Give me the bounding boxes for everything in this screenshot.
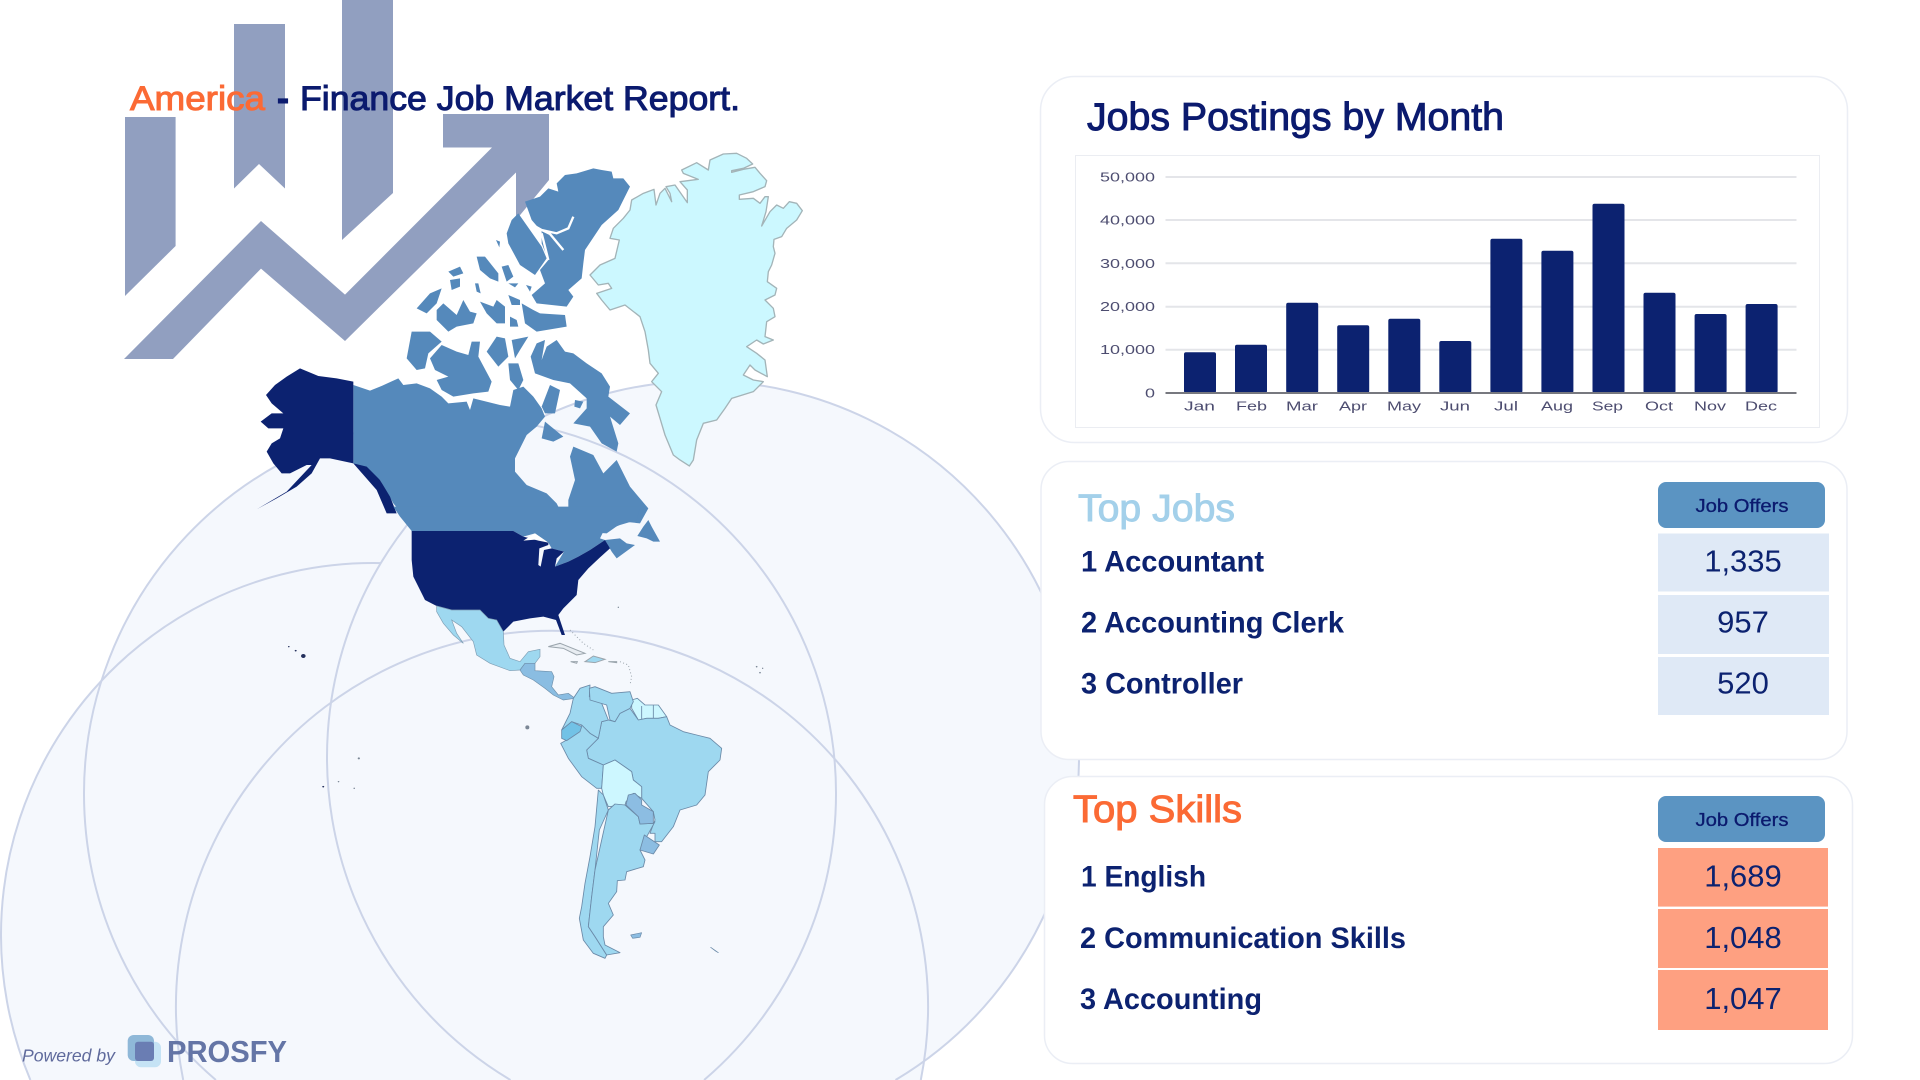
powered by Prosfy branding: Powered by [22,1046,116,1066]
bar chart [1076,156,1820,428]
chart heading: Jobs Postings by Month [1087,96,1504,139]
map: South America [561,685,722,958]
title: America [130,80,265,118]
bar chart: 20,000 [1100,299,1155,314]
row: Accounting Clerk: 957 [1717,604,1769,640]
bar chart: Sep [1592,399,1623,414]
title [130,80,740,118]
row: English: 1,689 [1704,858,1782,894]
map: small islands [525,607,763,729]
row: Controller: 3 Controller [1081,668,1243,700]
row: Accounting Clerk: 2 Accounting Clerk [1081,606,1344,640]
heading: top jobs: Top Jobs [1078,488,1235,530]
bar chart: May [1387,399,1422,414]
column header: job offers [1658,482,1825,528]
bar chart: Nov [1694,399,1727,414]
map: Pacific islands [288,646,360,789]
column header: job offers [1658,796,1825,842]
row: Controller [1081,657,1829,715]
row: Accounting [1080,970,1828,1030]
bar chart: Mar [1286,399,1319,414]
row: English [1081,848,1828,907]
map: Greenland [590,153,802,466]
bar chart: 40,000 [1100,212,1155,228]
panel: top jobs [1041,462,1847,760]
title: Finance Job Market Report. [300,80,740,118]
row: Communication Skills [1080,909,1828,968]
bar chart: Feb [1236,399,1267,414]
bar chart: Oct [1645,399,1674,414]
bar chart: Aug [1541,399,1573,414]
row: Accountant [1081,534,1829,592]
bar chart: Jun [1440,399,1470,414]
powered by Prosfy branding [22,1034,287,1069]
column header: job offers: Job Offers [1696,496,1788,516]
bar chart: Jan [1184,399,1215,414]
bar chart: 30,000 [1100,256,1155,271]
bar chart: 10,000 [1100,342,1155,357]
map of the Americas [257,153,802,958]
powered by Prosfy branding: PROSFY [167,1034,287,1069]
column header: job offers: Job Offers [1696,810,1788,830]
row: Controller: 520 [1717,666,1769,700]
row: Communication Skills: 2 Communication Skills [1080,922,1406,955]
row: Communication Skills: 1,048 [1704,920,1782,955]
map: Caribbean islands [548,630,632,685]
heading: top skills: Top Skills [1073,789,1242,831]
panel: top skills [1044,776,1852,1064]
row: Accountant: 1 Accountant [1081,546,1264,578]
panel: jobs postings by month [1040,76,1848,442]
bar chart: 0 [1145,386,1155,400]
bar chart: Apr [1339,399,1368,414]
map: southern Canada [393,507,660,567]
row: Accounting: 3 Accounting [1080,983,1262,1016]
map: Canada and Alaska [257,168,648,533]
watermark logo: rising arrow and bars [124,0,549,359]
map: USA, Mexico, Central America [393,507,763,729]
title: - [277,80,289,118]
icon: Prosfy logo [128,1035,161,1067]
background circles [1,381,1079,1080]
row: Accountant: 1,335 [1704,544,1782,578]
map: Mexico [437,606,540,671]
row: Accounting: 1,047 [1704,981,1782,1016]
bar chart: 50,000 [1100,170,1155,184]
row: English: 1 English [1081,860,1206,894]
row: Accounting Clerk [1081,595,1829,654]
map: USA [412,531,610,635]
map: Central America [520,663,575,700]
bar chart: Dec [1745,399,1778,414]
bar chart: Jul [1494,399,1518,414]
